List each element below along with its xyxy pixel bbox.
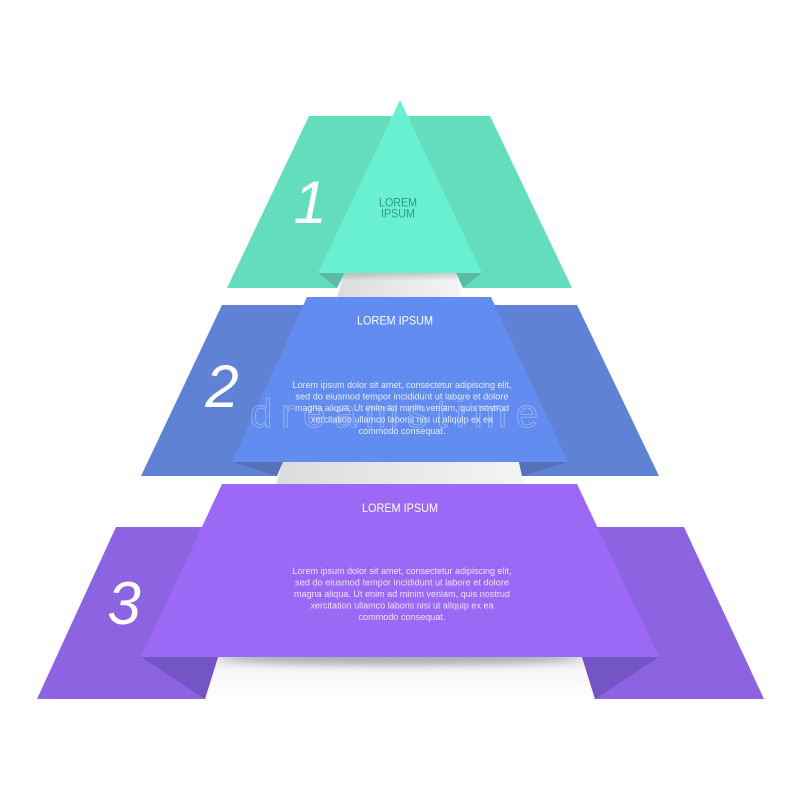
tier 2 body text bbox=[292, 380, 512, 436]
tier 2 back wings bbox=[141, 305, 659, 476]
tier 1 number: 1 bbox=[293, 169, 327, 236]
tier 1 label: LOREM bbox=[379, 198, 417, 210]
tier 1 triangle bbox=[318, 100, 482, 273]
tier 1 label bbox=[379, 198, 417, 220]
tier 3 body text: sed do eiusmod tempor incididunt ut labore et dolore bbox=[295, 578, 509, 588]
tier 2 body text: sed do eiusmod tempor incididunt ut labore et dolore bbox=[296, 392, 508, 402]
tier 2 heading: LOREM IPSUM bbox=[357, 314, 433, 328]
tier 3 front panel bbox=[141, 484, 659, 657]
tier 2 folds bbox=[232, 462, 568, 476]
watermark: dreamstime bbox=[250, 392, 538, 436]
panel: tier 1 bbox=[227, 100, 572, 297]
tier 2 body text: xercitation ullamco laboris nisi ut aliquip ex ea bbox=[311, 414, 493, 424]
tier 3 body text bbox=[292, 566, 512, 622]
tier 3 heading: LOREM IPSUM bbox=[362, 501, 438, 515]
tier 3 number: 3 bbox=[107, 570, 141, 637]
tier 1 label: IPSUM bbox=[381, 208, 415, 220]
tier 3 folds bbox=[141, 657, 659, 699]
tier 1 folds bbox=[318, 273, 482, 288]
panel: tier 2 bbox=[141, 297, 659, 484]
panel: tier 3 bbox=[37, 484, 764, 699]
tier 3 body text: Lorem ipsum dolor sit amet, consectetur adipiscing elit, bbox=[292, 566, 512, 576]
tier 3 body text: commodo consequat. bbox=[358, 612, 446, 622]
tier 3 body text: magna aliqua. Ut enim ad minim veniam, quis nostrud bbox=[294, 589, 510, 599]
tier 2 number: 2 bbox=[204, 353, 239, 420]
tier 1 grey connector bbox=[337, 273, 462, 297]
tier 3 back wings bbox=[37, 527, 764, 699]
tier 1 back wings bbox=[227, 116, 572, 288]
tier 2 body text: Lorem ipsum dolor sit amet, consectetur adipiscing elit, bbox=[292, 380, 512, 390]
tier 3 body text: xercitation ullamco laboris nisi ut aliquip ex ea bbox=[310, 600, 494, 610]
tier 2 body text: magna aliqua. Ut enim ad minim veniam, quis nostrud bbox=[295, 403, 509, 413]
tier 2 front panel bbox=[232, 297, 568, 462]
tier 2 grey connector bbox=[276, 462, 524, 484]
tier 3 underside shadow bbox=[205, 651, 595, 699]
tier 2 body text: commodo consequat. bbox=[358, 426, 446, 436]
